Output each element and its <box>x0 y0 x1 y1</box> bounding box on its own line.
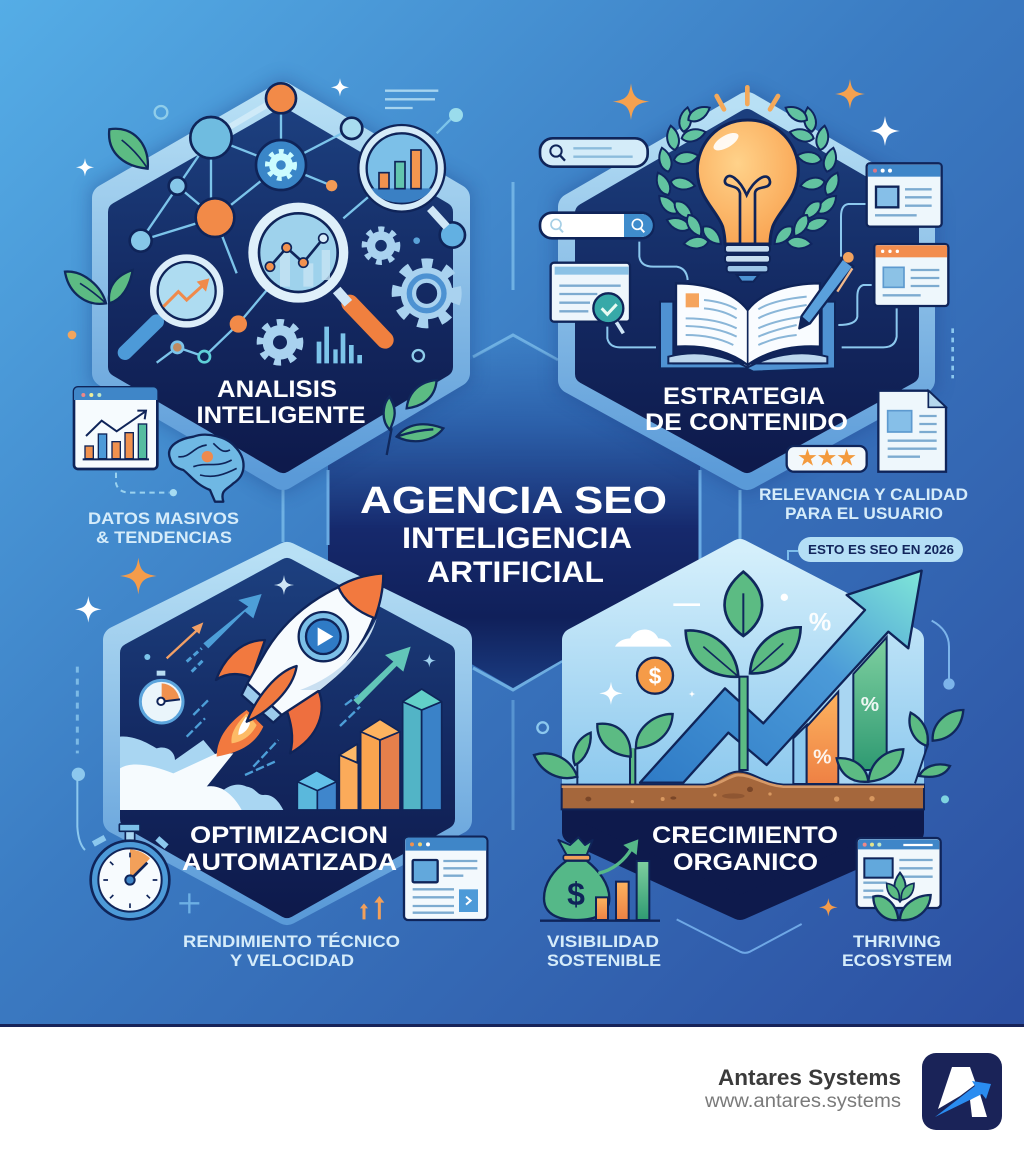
hexagon base <box>574 808 912 908</box>
title: optimizacion: OPTIMIZACION <box>190 822 388 849</box>
rays and stars <box>613 79 900 146</box>
dashed line <box>949 328 957 378</box>
subtitle: artificial: ARTIFICIAL <box>427 556 604 589</box>
hexagon frame <box>572 106 921 476</box>
caption: sostenible: SOSTENIBLE <box>547 951 661 970</box>
flame <box>217 710 263 757</box>
open book <box>660 283 835 372</box>
soil <box>562 772 924 809</box>
title: de contenido: DE CONTENIDO <box>645 409 848 436</box>
money bag: $ <box>567 876 585 912</box>
arrows <box>167 594 411 775</box>
illustration: network and magnifiers <box>65 78 465 502</box>
left deco line <box>72 667 85 850</box>
hexagon interior <box>585 119 909 463</box>
caption: thriving: THRIVING <box>853 932 941 951</box>
center title <box>360 480 667 589</box>
cloud <box>615 630 672 647</box>
pen <box>799 252 854 328</box>
caption: ecosystem: ECOSYSTEM <box>842 951 952 970</box>
caption: visibilidad: VISIBILIDAD <box>547 932 659 951</box>
clouds <box>120 737 247 810</box>
caption: rendimiento: RENDIMIENTO TÉCNICO <box>183 932 400 951</box>
hexagon sky <box>574 551 912 790</box>
percent labels: % <box>809 609 831 637</box>
hexagon interior <box>118 118 443 463</box>
3d bars <box>297 689 442 810</box>
panel: crecimiento organico <box>534 537 963 970</box>
brand name: Antares Systems <box>718 1065 901 1090</box>
percent labels <box>809 609 879 768</box>
sparkles <box>599 594 788 705</box>
brain icon <box>169 435 244 502</box>
up arrows <box>364 900 379 919</box>
caption: tendencias: & TENDENCIAS <box>96 528 232 547</box>
search bar 1 <box>540 138 648 167</box>
up arrow heads <box>360 896 384 908</box>
small stopwatch <box>140 671 183 723</box>
percent labels: % <box>813 745 832 768</box>
orange star <box>819 898 837 916</box>
lightbulb <box>697 120 798 282</box>
decor lines <box>385 91 438 108</box>
browser with plant <box>857 838 941 920</box>
laurel <box>653 103 725 250</box>
panel: optimizacion automatizada <box>72 556 487 970</box>
coin <box>637 658 673 694</box>
laurel right <box>770 103 843 250</box>
cloud dash <box>673 601 700 609</box>
magnifier: line chart <box>248 203 385 340</box>
main plant <box>686 572 801 770</box>
footer divider <box>0 1024 1024 1027</box>
title: inteligente: INTELIGENTE <box>196 402 366 429</box>
document <box>878 391 946 472</box>
footer background <box>0 1026 1024 1154</box>
browser chart card <box>74 387 157 469</box>
dots <box>155 106 424 361</box>
pill: esto es seo: ESTO ES SEO EN 2026 <box>808 542 954 557</box>
center hexagon <box>328 335 700 688</box>
panel: analisis inteligente <box>65 78 465 547</box>
caption: relevancia: RELEVANCIA Y CALIDAD <box>759 485 968 504</box>
big stopwatch <box>91 824 169 919</box>
caption: velocidad: Y VELOCIDAD <box>230 951 354 970</box>
center hexagon edges <box>328 470 700 565</box>
connector lines <box>283 182 740 830</box>
percent labels: % <box>861 693 879 716</box>
footer <box>0 1024 1024 1154</box>
deco right <box>537 621 955 803</box>
pill: esto es seo <box>788 537 963 562</box>
hexagon interior <box>130 568 445 908</box>
growth arrow <box>640 571 922 783</box>
money bag <box>540 837 660 921</box>
gears <box>260 229 456 362</box>
network links <box>141 98 455 363</box>
brand url: www.antares.systems <box>704 1091 901 1112</box>
hexagon frame <box>106 96 456 476</box>
illustration: rocket <box>72 558 487 920</box>
sparkles <box>75 558 436 667</box>
card with check <box>551 263 630 333</box>
illustration: plant and growth <box>534 571 963 953</box>
hexagon frame <box>117 556 458 911</box>
bars <box>793 637 887 784</box>
network nodes <box>130 83 465 362</box>
magnifier: trend <box>125 254 223 353</box>
browser card <box>404 837 487 920</box>
title: organico: ORGANICO <box>673 849 818 876</box>
logo <box>922 1053 1002 1130</box>
rating pill: ★★★ <box>797 444 857 472</box>
stars <box>76 78 349 176</box>
exhaust clouds <box>120 753 242 810</box>
right cloud <box>210 785 283 810</box>
coin: $ <box>649 663 662 689</box>
subtitle: inteligencia: INTELIGENCIA <box>402 522 632 555</box>
panel: estrategia de contenido <box>540 79 968 523</box>
mini bars <box>317 327 362 363</box>
dashed connector <box>116 473 169 493</box>
title: analisis: ANALISIS <box>217 376 337 403</box>
illustration: lightbulb and book <box>540 79 953 472</box>
caption: datos: DATOS MASIVOS <box>88 509 239 528</box>
card right top <box>867 163 942 227</box>
title: agencia seo: AGENCIA SEO <box>360 480 667 522</box>
small plants <box>534 710 963 784</box>
title: estrategia: ESTRATEGIA <box>663 383 825 410</box>
rocket <box>216 573 383 753</box>
plus sign <box>179 893 199 913</box>
card right bottom <box>874 244 948 306</box>
search bar 2 <box>540 213 653 238</box>
title: automatizada: AUTOMATIZADA <box>182 849 397 876</box>
gear node icon <box>267 151 295 179</box>
connectors <box>607 204 897 347</box>
leaves <box>65 129 443 455</box>
chevron line <box>677 919 802 953</box>
title: crecimiento: CRECIMIENTO <box>652 822 838 849</box>
magnifier: bars <box>358 125 447 227</box>
caption: usuario: PARA EL USUARIO <box>785 504 943 523</box>
